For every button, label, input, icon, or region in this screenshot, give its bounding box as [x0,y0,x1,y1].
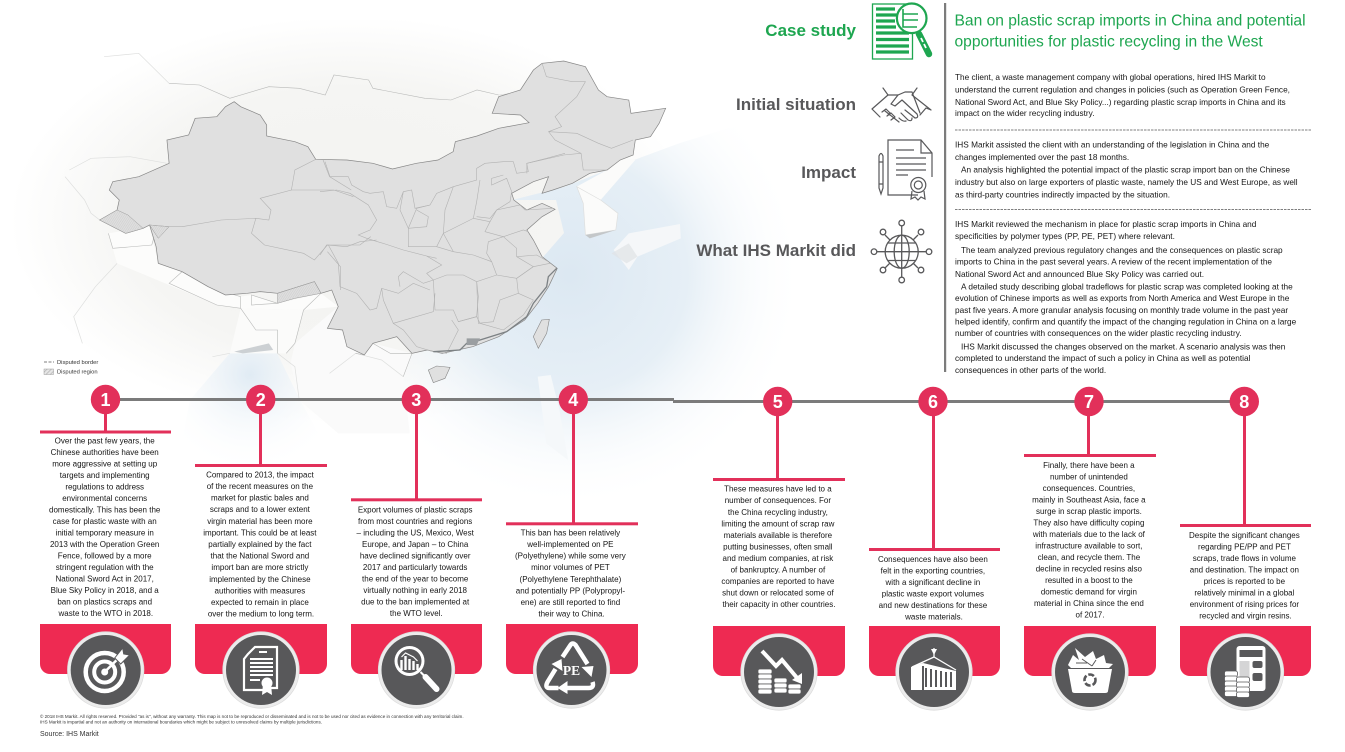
step 5: the China recycling industry, [728,508,828,517]
icon: shipping container on crane hook [911,648,956,690]
step 8: recycled and virgin resins. [1199,612,1292,620]
step 2: that the National Sword and [211,552,309,561]
step 8: Despite the significant changes [1189,531,1300,540]
step 4: ene) are still reported to find [521,598,620,607]
step 5: These measures have led to a [724,485,832,494]
step 7: They also have difficulty coping [1033,518,1144,528]
step 7: infrastructure available to sort, [1035,542,1142,550]
step 8: 8 [1239,392,1249,412]
vertical divider [944,3,946,372]
provincial borders (west and northeast) [150,63,633,290]
icon: contract with seal and pen [879,140,932,200]
step 5: putting businesses, often small [723,542,833,551]
what IHS Markit did text: National Sword Act and announced Blue Sky Policy was carried out. [955,270,1204,279]
step 2: virgin material has been more [207,517,313,526]
step 8: regarding PE/PP and PET [1198,542,1291,552]
map legend: Disputed region [57,370,98,376]
report title: opportunities for plastic recycling in the West [954,34,1263,50]
step 5: 5 [773,392,783,412]
icon: magnifier over bar chart [394,646,436,689]
what IHS Markit did text: past five years. A more granular analysis focusing on monthly trade volume in the past year [955,306,1288,315]
step 3: the end of the year to become [362,575,469,584]
report title [954,12,1306,50]
step 3: Export volumes of plastic scraps [358,506,473,515]
step 1: National Sword Act in 2017, [56,575,154,584]
impact heading: Impact [801,163,856,182]
what IHS Markit did text: number of countries with consequences on the wider plastic recycling industry. [955,329,1242,338]
step 4: (Polyethylene Terephthalate) [520,575,622,584]
step 3: have declined significantly over [360,552,471,561]
step 1: ban on plastics scraps and [57,598,152,607]
step 4: minor volumes of PET [531,563,610,572]
icon: globe network [871,220,932,283]
step 4: (Polyethylene) while some very [515,552,626,561]
copyright note: IHS Markit is impartial and not an authority on international boundaries which might be subject to unresolved claims by multiple jurisdictions. [40,720,322,724]
step 7: decline in recycled resins also [1036,564,1143,574]
icon: PE recycling symbol: PE [563,663,580,678]
impact text: changes implemented over the past 18 months. [955,153,1129,162]
step 3: due to the ban implemented at [361,598,470,607]
step 5 [713,387,845,710]
impact text: as third-party countries indirectly impacted by the situation. [955,190,1170,200]
step 4: and potentially PP (Polypropyl- [516,586,625,595]
map legend [44,360,98,376]
step 6: with a significant decline in [885,578,980,587]
step 5: shut down or relocated some of [722,588,834,597]
what IHS Markit did text: completed to understand the impact of such a policy in China as well as potential [955,354,1251,363]
initial situation text: The client, a waste management company with global operations, hired IHS Markit to [955,73,1266,82]
step 3: virtually nothing in early 2018 [363,586,468,595]
what IHS Markit did text: consequences in other parts of the world. [955,366,1106,375]
step 4: well-implemented on PE [526,540,614,549]
step 3: Europe, and Japan – to China [362,540,469,549]
step 1: Over the past few years, the [55,437,155,446]
step 5: and medium companies, at risk [723,554,834,563]
step 5: materials available is therefore [724,531,833,540]
step 5: their capacity in other countries. [723,600,835,609]
step 7: 7 [1084,392,1094,412]
copyright note: © 2018 IHS Markit. All rights reserved. Provided "as is", without any warranty. This map is not to be reproduced or disseminated and is not to be used nor cited as evidence in connection with any territorial claim. [40,713,464,719]
China mainland [100,61,666,355]
step 2: Compared to 2013, the impact [206,470,314,479]
step 1: domestically. This has been the [49,506,161,515]
what IHS Markit did text: A detailed study describing global tradeflows for plastic scrap was completed looking at the [961,282,1293,292]
initial situation text: National Sword Act, and Blue Sky Policy...) regarding plastic scrap imports in China and its [955,98,1286,107]
step 6: waste materials. [904,612,963,622]
step 1: stringent regulation with the [56,563,154,572]
step 2: authorities with measures [215,586,305,595]
step 3: – including the US, Mexico, West [357,529,475,538]
step 7: Finally, there have been a [1043,461,1135,470]
step 7: of 2017. [1076,610,1104,620]
report title: Ban on plastic scrap imports in China and potential [954,12,1306,30]
step 1 [40,385,171,708]
icon: certificate document [244,647,277,695]
step 6: 6 [928,392,938,412]
initial situation text: impact on the wider recycling industry. [955,109,1095,118]
step 7 [1024,387,1156,710]
step 1: waste to the WTO in 2018. [58,609,153,618]
step 6: Consequences have also been [878,555,988,564]
neighbouring land [108,158,681,460]
step 7: with materials due to the lack of [1032,530,1146,539]
step 3: the WTO level. [390,609,443,618]
case study icon [872,3,929,59]
step 7: resulted in a boost to the [1045,576,1133,585]
what IHS Markit did text: imports to China in the past several years. A review of the recent implementation of the [955,258,1272,266]
disputed regions [100,210,321,303]
step 7: number of unintended [1050,472,1128,482]
provincial borders (east), Hainan and Taiwan [320,153,565,383]
step 7: surge in scrap plastic imports. [1036,507,1142,516]
step 8 [1180,387,1311,710]
step 5: companies are reported to have [721,577,835,586]
step 3: 2017 and particularly towards [363,563,467,572]
step 2: import ban are more strictly [211,563,308,572]
step 7: consequences. Countries, [1043,484,1135,493]
impact text [955,140,1298,200]
step 7: domestic demand for virgin [1041,588,1137,596]
step 2: scraps and to a lower extent [210,505,311,514]
icon: handshake [872,88,931,122]
step 3: 3 [411,390,421,410]
impact text: An analysis highlighted the potential impact of the plastic scrap import ban on the Chinese [961,166,1290,174]
copyright note [40,713,464,724]
case study heading: Case study [765,21,857,40]
initial situation text [955,73,1290,118]
what IHS Markit did text: IHS Markit reviewed the mechanism in place for plastic scrap imports in China and [955,220,1257,229]
what IHS Markit did text: The team analyzed previous regulatory changes and the consequences on plastic scrap [961,246,1283,255]
step 7: mainly in Southeast Asia, face a [1032,496,1146,504]
what IHS Markit did text: evolution of Chinese imports as well as exports from North America and West Europe in the [955,294,1290,303]
step 1: initial temporary measure in [56,529,154,538]
step 6: and new destinations for these [879,601,988,610]
step 5: limiting the amount of scrap raw [721,519,835,528]
impact text: IHS Markit assisted the client with an understanding of the legislation in China and the [955,140,1270,150]
step 8: environment of rising prices for [1190,600,1299,609]
step 8: prices is reported to be [1204,577,1286,586]
what IHS Markit did text: helped identify, confirm and quantify the impact of the changing regulation in China on a large [955,318,1297,326]
initial situation heading: Initial situation [736,95,856,114]
icon: target with arrow [86,648,130,691]
step 4 [506,385,638,708]
map of China and neighbouring countries [0,20,820,560]
step 5: of bankruptcy. A number of [731,565,826,574]
step 1: 1 [100,390,111,410]
step 1: more aggressive at setting up [52,460,158,469]
what IHS Markit did text: specificities by polymer types (PP, PE, PET) where relevant. [955,232,1175,241]
step 2: of the recent measures on the [207,482,314,491]
step 6 [869,387,1000,710]
step 3: from most countries and regions [358,517,472,526]
step 1: targets and implementing [60,471,150,480]
step 7: material in China since the end [1034,599,1144,608]
what IHS Markit did heading: What IHS Markit did [696,241,856,260]
step 7: clean, and recycle them. The [1038,553,1141,562]
step 6: felt in the exporting countries, [881,566,985,576]
step 3 [351,385,482,708]
step 1: 2013 with the Operation Green [50,540,159,549]
step 2: implemented by the Chinese [209,575,311,584]
map legend: Disputed border [57,360,98,366]
step 5: number of consequences. For [725,496,831,505]
initial situation text: understand the current regulation and changes in policies (such as Operation Green Fence, [955,86,1290,94]
step 1: Chinese authorities have been [51,448,159,457]
step 8: and destination. The impact on [1190,566,1299,574]
step 2: expected to remain in place [211,598,309,607]
step 2: partially explained by the fact [208,540,312,549]
step 2 [195,385,327,708]
icon: PE recycling symbol [546,644,594,694]
icon: recycling bin full of waste [1068,648,1113,693]
step 2: over the medium to long term. [208,610,314,619]
step 2: 2 [256,390,266,410]
step 1: regulations to address [65,483,144,492]
step 2: important. This could be at least [203,528,317,537]
what IHS Markit did text: IHS Markit discussed the changes observed on the market. A scenario analysis was then [961,342,1286,352]
timeline line [105,398,1245,403]
step 4: This ban has been relatively [521,528,620,538]
icon: falling arrow and coins [758,651,802,694]
step 1: Blue Sky Policy in 2018, and a [51,586,159,595]
icon: calculator and coins [1224,646,1266,698]
impact text: industry but also on large exporters of plastic waste, namely the US and West Europe, as well [955,178,1298,187]
step 1: Fence, followed by a more [58,552,152,561]
what IHS Markit did text [955,220,1297,375]
step 6: plastic waste export volumes [882,590,984,598]
step 8: relatively minimal in a global [1194,588,1295,598]
step 4: 4 [568,390,578,410]
step 2: market for plastic bales and [211,494,309,503]
step 8: scraps, trade flows in volume [1193,554,1297,563]
step 4: their way to China. [538,609,605,618]
source line: Source: IHS Markit [40,731,99,738]
step 1: case for plastic waste with an [53,517,157,526]
step 1: environmental concerns [62,494,147,503]
